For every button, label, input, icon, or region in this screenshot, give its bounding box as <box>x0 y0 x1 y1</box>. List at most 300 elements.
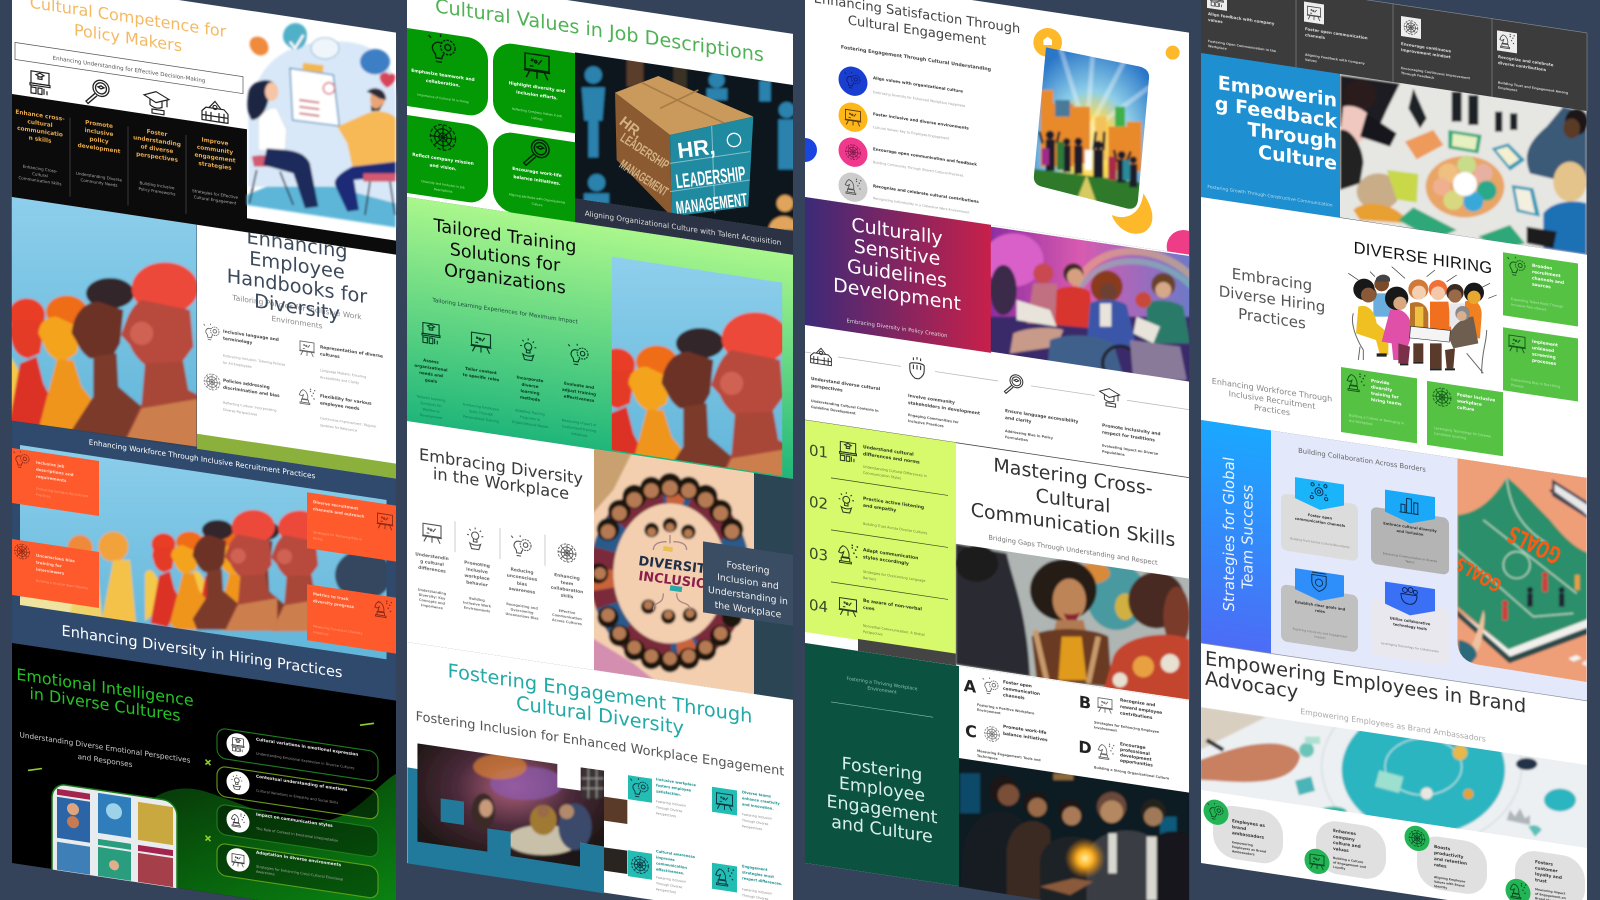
item: align values: Embracing Diversity for Enhanced Workplace Happiness <box>873 90 966 108</box>
photo: goals field book: GOALS <box>1503 520 1566 570</box>
card: mission: and vision. <box>429 162 457 172</box>
photo: diversity circle: INCLUSION <box>638 569 718 594</box>
step: reducing: Recognizing and <box>506 602 538 611</box>
card: cultural diversity: and inclusion <box>1397 529 1424 537</box>
step: evaluate <box>562 341 597 440</box>
title: Mastering Cross- <box>993 453 1153 500</box>
item: flexibility: Flexibility for various <box>320 394 372 407</box>
item: diverse teams: enhance creativity <box>742 796 780 806</box>
callout: metrics: diversity progress <box>313 598 355 609</box>
card: clear goals: roles <box>1315 609 1325 614</box>
card: clear goals <box>1281 566 1358 653</box>
panel: blue title: Through <box>1247 118 1337 154</box>
card: cultural variations: Cultural variations in emotional expression <box>256 737 358 757</box>
item: encourage communication <box>838 136 977 185</box>
title: Fostering <box>842 754 922 786</box>
goal 4: Strategies for Effective <box>192 188 238 200</box>
step: promoting: Environments <box>464 606 490 613</box>
title: Policy Makers <box>74 20 182 55</box>
callout: job descriptions: Inclusive job <box>36 460 64 469</box>
photo: clay heads <box>612 256 782 476</box>
feedback 1: values <box>1208 17 1223 24</box>
title: Diverse Hiring <box>1219 282 1325 316</box>
goal 2: inclusive <box>85 128 113 138</box>
card: communication channels: communication channels <box>1295 517 1345 528</box>
box: training: the Workplace <box>1349 419 1373 426</box>
card: technology tools: Utilize collaborative <box>1390 616 1430 626</box>
card: clear goals: Exploring Inclusivity and Engagement <box>1293 627 1347 639</box>
step: incorporate: Programs to <box>520 415 540 422</box>
box: culture: Leveraging Technology for Diverse <box>1434 426 1491 438</box>
title: Cultural <box>1036 484 1110 518</box>
hand-drawn heading: DIVERSE HIRING <box>1354 238 1492 278</box>
item: recognize: Recognize and celebrate cultural contributions <box>873 183 979 204</box>
feedback 3 <box>1401 16 1470 85</box>
subtitle box <box>15 42 243 94</box>
card: ambassadors: Employees as Brand <box>1232 845 1266 854</box>
feedback 4 <box>1497 30 1569 100</box>
goal 2 <box>76 119 122 189</box>
step: understand: Guideline Development <box>811 405 856 416</box>
box: culture: workplace <box>1457 398 1482 408</box>
step: assess: Development <box>420 413 443 420</box>
title: Culturally <box>851 213 943 250</box>
number 03 <box>809 539 925 589</box>
title: Guidelines <box>847 254 947 292</box>
card: cultural diversity: Embrace cultural diversity <box>1383 521 1437 533</box>
icon: magnifier <box>86 78 109 107</box>
goal 1: cultural <box>27 119 53 129</box>
card: enhances culture: Enhances <box>1333 829 1356 837</box>
item A: Environment <box>977 708 1001 715</box>
card: ambassadors: ambassadors <box>1232 830 1264 841</box>
card: loyalty <box>1506 847 1585 900</box>
number 03: Barriers <box>863 576 877 582</box>
item C: Measuring Engagement: Tools and <box>977 749 1041 762</box>
subtitle: Fostering Engagement Through Cultural Understanding <box>841 44 992 73</box>
step: promoting: workplace <box>464 573 490 582</box>
step: incorporate: learning <box>520 388 540 396</box>
item: representation: cultures <box>320 351 340 360</box>
goal 2: policy <box>89 137 109 146</box>
goal 4: engagement <box>194 152 236 165</box>
item A: Foster open <box>1003 680 1032 690</box>
title: Handbooks for <box>227 264 367 308</box>
item: representation: Representation of diverse <box>320 345 383 360</box>
card: ambassadors: Ambassadors <box>1232 849 1255 857</box>
item: cultural awareness: communication <box>656 861 687 870</box>
box: implement: Overcoming Bias in the Hiring <box>1511 378 1560 389</box>
item: recognize: Recognizing Individuality in a Collective Work Environment <box>873 196 970 215</box>
card: work-life balance: Aligning Job Roles with Organizational <box>509 192 565 205</box>
subtitle: Practices <box>1254 403 1290 417</box>
item: representation <box>299 341 383 389</box>
column 3 slides <box>805 0 1203 900</box>
title: Cultural Engagement <box>848 14 986 49</box>
card: loyalty: trust <box>1535 877 1547 885</box>
photo: HR cube <box>575 52 793 231</box>
box: broaden: recruitment <box>1532 269 1561 279</box>
panel: blue title: g Feedback <box>1215 92 1338 133</box>
box: implement <box>1503 327 1578 402</box>
photo: HR cube: LEADERSHIP <box>618 130 672 173</box>
card: adaptation: Adaptation in diverse environments <box>256 850 342 867</box>
step: ensure: and clarity <box>1005 415 1032 425</box>
callout: recruitment channels: Diverse recruitment <box>313 499 358 511</box>
panel: white slide <box>1201 643 1587 900</box>
photo: clay heads <box>12 196 197 446</box>
illustration: diverse hiring team <box>1348 267 1497 373</box>
goal 4: community <box>197 145 233 156</box>
slide: mastering cross-cultural communication <box>805 420 1193 703</box>
card: cultural variations: Understanding Emotional Expression in Diverse Cultures <box>256 752 355 770</box>
panel: dark feedback strip <box>1201 0 1587 255</box>
panel: white slide <box>1201 197 1587 478</box>
photo: team at table with blocks <box>407 740 627 893</box>
card: loyalty: customer <box>1535 865 1559 875</box>
card: productivity <box>1404 824 1487 897</box>
item: inclusive workplace: Inclusive workplace <box>656 777 696 787</box>
card: productivity: and retention <box>1434 856 1467 867</box>
card: mission: Descriptions <box>434 187 453 194</box>
goal 2: Promote <box>85 120 113 130</box>
step: assess <box>414 321 448 421</box>
item C: C <box>965 721 977 742</box>
step: reducing: awareness <box>509 586 536 596</box>
step: assess: Solutions for <box>420 401 442 408</box>
feedback 3: improvement mindset <box>1401 47 1451 59</box>
title: Development <box>833 273 961 315</box>
slide: emotional intelligence <box>12 643 396 900</box>
panel: callouts <box>12 448 396 654</box>
number 01: Understanding Cultural Differences in <box>863 465 927 478</box>
step: involve: Engaging Communities for <box>908 413 959 425</box>
panel: white slide with gradient header <box>805 197 1189 478</box>
step: promote: respect for traditions <box>1102 430 1155 444</box>
box: broaden: sources <box>1532 282 1551 290</box>
title: Tailored Training <box>434 216 576 257</box>
step: enhancing <box>551 542 583 626</box>
step: involve: Involve community <box>908 394 955 406</box>
callout: fostering inclusion: Understanding in <box>708 585 788 608</box>
title: Fostering Engagement Through <box>448 659 752 728</box>
card: ambassadors <box>1204 798 1283 866</box>
card: enhances culture <box>1304 817 1386 884</box>
panel: white slide <box>407 642 793 900</box>
card: loyalty: Measuring Impact <box>1535 887 1565 896</box>
step: assess: organizational <box>414 363 448 373</box>
step: tailor: Enhancing Employee <box>463 402 499 412</box>
item B: contributions <box>1120 710 1153 721</box>
number 04: Be aware of non-verbal <box>863 599 922 613</box>
card: loyalty: loyalty and <box>1535 871 1562 881</box>
step: evaluate: Customized Training <box>562 424 596 433</box>
number 04: Nonverbal Communication: A Global <box>863 624 925 637</box>
item: cultural awareness: improves <box>656 855 675 862</box>
item D: opportunities <box>1120 758 1153 769</box>
step: reducing: Reducing <box>511 568 533 576</box>
card: enhances culture: of Engagement and <box>1333 860 1366 869</box>
panel: blue side title <box>1201 420 1271 654</box>
number 01 <box>809 436 927 484</box>
step: tailor: Skills Through <box>469 409 493 417</box>
box: culture: culture <box>1457 405 1474 413</box>
step: tailor: to specific roles <box>463 372 500 382</box>
step: involve: Inclusive Practices <box>908 419 944 428</box>
item: inclusive workplace: Through Diverse <box>655 805 682 813</box>
subtitle: Inclusive Recruitment <box>1229 389 1315 411</box>
item C: balance initiatives <box>1003 731 1048 743</box>
feedback 3: Encourage continuous <box>1401 41 1451 53</box>
item: cultural awareness: Through Diverse <box>655 881 682 889</box>
goal 1: Enhance cross- <box>15 110 65 123</box>
step: incorporate: Incorporate <box>517 374 543 383</box>
photo: conversation <box>953 540 1193 703</box>
step: evaluate: effectiveness <box>564 394 595 403</box>
card: enhances culture: values <box>1333 846 1349 854</box>
step: tailor: Personalized Training <box>463 414 499 424</box>
slide: embracing diverse hiring <box>1201 197 1587 478</box>
card: teamwork: Importance of Cultural fit in Hiring <box>417 93 469 104</box>
panel: black goals <box>12 94 396 255</box>
item: foster inclusive: Foster inclusive and diverse environments <box>873 111 969 131</box>
card: productivity: Boosts <box>1434 845 1450 852</box>
step: assess: needs and <box>419 370 443 378</box>
item: representation: Language Matters: Ensuring <box>320 368 366 379</box>
box: broaden: channels and <box>1532 275 1564 286</box>
box: broaden: Inclusive Recruitment <box>1511 303 1547 312</box>
feedback 3: Encouraging Continuous Improvement <box>1401 66 1470 80</box>
card: work-life balance: balance initiatives. <box>513 174 561 187</box>
box: training: hiring teams <box>1371 397 1402 408</box>
card: enhances culture: Loyalty <box>1333 865 1345 871</box>
card: productivity: Identity <box>1434 884 1447 890</box>
card: communication channels: Foster open <box>1308 513 1332 521</box>
callout: job descriptions: Practices <box>36 493 51 499</box>
card: communication channels: Building Trust Across Cultural Boundaries <box>1290 536 1350 549</box>
number 03: Strategies for Overcoming Language <box>863 570 925 583</box>
title: Engagement <box>827 792 938 828</box>
number 01: Understand cultural <box>863 445 914 458</box>
card: teamwork <box>407 28 488 118</box>
card: contextual understanding: Contextual understanding of emotions <box>256 774 348 792</box>
number 03: Adapt communication <box>863 548 918 561</box>
card: diversity efforts: inclusion efforts. <box>516 89 558 102</box>
step: involve: stakeholders in development <box>908 400 980 417</box>
slide: empowering feedback <box>1201 0 1590 260</box>
goal 4: strategies <box>198 161 232 172</box>
item: encourage communication: Encourage open communication and feedback <box>873 146 977 167</box>
box: broaden <box>1503 252 1578 327</box>
item: cultural awareness: effectiveness. <box>656 867 684 876</box>
item: engagement strategies <box>712 860 782 900</box>
item: inclusive workplace: fosters employee <box>656 783 692 793</box>
callout: recruitment channels <box>307 492 396 562</box>
kicker: Fostering a Thriving Workplace <box>846 677 918 692</box>
decorative circles <box>805 28 1203 267</box>
step: understand <box>811 347 881 419</box>
feedback 1: Fostering Open Communication in the <box>1208 39 1276 53</box>
box: implement: unbiased <box>1532 345 1554 354</box>
callout: fostering inclusion: the Workplace <box>715 600 782 621</box>
item: representation: Accessibility and Clarity <box>320 375 359 385</box>
box: implement: Process <box>1511 383 1524 389</box>
goal 3: Foster <box>147 129 167 138</box>
feedback 1: Workplace <box>1208 44 1228 51</box>
card: adaptation: Awareness <box>256 870 275 876</box>
title: Sensitive <box>854 234 940 270</box>
card: mission: Reflect company mission <box>412 153 474 167</box>
photo: diversity circle <box>588 443 757 700</box>
card: technology tools: Leveraging Technology for Collaboration <box>1381 641 1439 654</box>
step: understanding: g cultural <box>420 558 444 568</box>
title: Solutions for <box>450 240 561 277</box>
card: productivity: rates <box>1434 862 1447 870</box>
step: enhancing: skills <box>561 593 574 600</box>
feedback 4: Employees <box>1498 86 1517 92</box>
step: assess: goals <box>425 377 438 384</box>
title: Emotional Intelligence <box>16 665 194 710</box>
step: incorporate: Organizational Needs <box>512 420 548 429</box>
photo: HR cube: HR, <box>676 134 717 163</box>
caption: Enhancing Workforce Through Inclusive Recruitment Practices <box>89 438 315 481</box>
goal 1: Communication Skills <box>18 175 62 186</box>
callout: fostering inclusion: Fostering <box>726 559 770 577</box>
panel: blue side title: Team Success <box>1239 483 1256 592</box>
callout: metrics: Metrics to track <box>313 591 349 602</box>
item: encourage communication: Building Community Through Shared Cultural Practices <box>873 160 964 178</box>
illustration: consultation <box>247 23 396 227</box>
callout: job descriptions: requirements <box>36 474 67 483</box>
photo: HR cube: LEADERSHIP <box>675 163 747 193</box>
step: understanding: differences <box>418 565 446 575</box>
column 4 slides <box>1200 0 1593 900</box>
goal 3 <box>133 127 181 197</box>
subtitle: Empowering Employees as Brand Ambassadors <box>1300 707 1486 744</box>
card: teamwork: collaboration. <box>426 78 460 89</box>
step: understand: Understand diverse cultural <box>811 377 880 392</box>
step: ensure: Addressing Bias in Policy <box>1005 429 1053 440</box>
item: flexibility: Continuous Improvement: Regular <box>320 416 376 429</box>
item: flexibility <box>299 388 377 436</box>
goal 3: understanding <box>133 135 181 148</box>
goal 3: Building Inclusive <box>139 180 175 190</box>
item B: Involvement <box>1094 725 1117 733</box>
card: technology tools <box>1371 580 1449 666</box>
feedback 4: Recognize and celebrate <box>1498 54 1553 67</box>
goal 1: n skills <box>29 136 52 145</box>
callout: metrics: Measuring Success in Diversity <box>313 624 363 636</box>
column 2 slides <box>407 0 800 900</box>
slide: fostering employee engagement <box>805 643 1193 900</box>
photo: group around table <box>1337 70 1590 260</box>
item: inclusive workplace: Fostering Inclusion <box>656 799 686 808</box>
callout: unconscious bias: training for <box>36 560 62 568</box>
goal 1: communicatio <box>17 126 63 139</box>
item A: A <box>964 676 977 697</box>
number 02 <box>809 487 927 535</box>
photo: HR cube: MANAGEMENT <box>675 189 748 218</box>
item: policies: Policies addressing <box>223 379 270 391</box>
card: cultural diversity <box>1371 488 1449 575</box>
step: assess: Tailored Learning <box>417 394 445 403</box>
step: assess: Assess <box>423 357 439 365</box>
title: and Culture <box>831 813 933 848</box>
step: enhancing: collaboration <box>551 585 583 595</box>
slide: employee handbooks <box>0 187 396 479</box>
feedback 1: Align feedback with company <box>1208 11 1274 26</box>
title: Employee <box>249 247 345 284</box>
subtitle box: Enhancing Understanding for Effective Decision-Making <box>53 56 205 84</box>
card: clear goals: Establish clear goals and <box>1295 600 1345 612</box>
title: Organizations <box>444 261 566 299</box>
teal blocks <box>407 767 604 893</box>
frame clip filler below slide <box>42 868 187 900</box>
item: diverse teams: Diverse teams <box>742 790 771 799</box>
feedback 2: channels <box>1305 32 1326 40</box>
title: Enhancing Diversity in Hiring Practices <box>62 623 342 682</box>
step: enhancing: Effective <box>559 609 575 615</box>
callout: fostering inclusion: Inclusion and <box>717 572 779 592</box>
photo: goals field book: GOALS <box>1452 552 1506 596</box>
subtitle: Tailoring Policies for Inclusive Work <box>232 293 362 321</box>
photo: team around lightbulb <box>957 757 1193 900</box>
item C: Techniques <box>977 754 998 761</box>
callout: job descriptions: Embracing Inclusive Recruitment <box>36 487 89 498</box>
callout: metrics <box>307 584 396 654</box>
item: inclusive workplace: satisfaction. <box>656 789 681 797</box>
photo overlay subtitle and cards <box>1204 692 1585 900</box>
panel: light slide <box>1201 420 1587 701</box>
goal 4: Improve <box>202 137 228 147</box>
item A <box>964 673 1040 721</box>
item: foster inclusive: Cultural Values: Key to Employee Engagement <box>873 125 950 141</box>
goal 1: Cultural <box>32 171 48 178</box>
step: incorporate: Adapting Training <box>515 408 545 417</box>
callout: job descriptions: descriptions and <box>36 467 74 477</box>
item B: reward employee <box>1120 704 1162 716</box>
goal 4 <box>192 136 238 206</box>
number 04: cues <box>863 606 875 612</box>
title: Employee <box>839 774 925 806</box>
subtitle: Enhancing Workforce Through <box>1212 377 1332 404</box>
item A: communication <box>1003 686 1040 697</box>
step: ensure: Ensure language accessibility <box>1005 409 1078 425</box>
card: ambassadors: Empowering <box>1232 840 1253 847</box>
box: implement: Implement <box>1532 340 1558 349</box>
feedback 4: diverse contributions <box>1498 60 1547 72</box>
number 02: 02 <box>809 493 828 513</box>
item D: Building a Strong Organizational Culture <box>1094 765 1170 781</box>
slide: enhancing satisfaction <box>805 0 1203 267</box>
callout: recruitment channels: Strategies for Reducing Bias in <box>313 530 362 542</box>
icon: lab <box>30 71 50 96</box>
photo: HR cube: HR, <box>616 114 646 142</box>
item: diverse teams <box>712 786 780 834</box>
item: engagement strategies: Engagement <box>742 864 767 872</box>
item D: D <box>1078 737 1092 758</box>
callout: unconscious bias: interviewers <box>36 567 65 576</box>
slide: empowering brand advocacy <box>1200 643 1593 900</box>
callout: unconscious bias: Unconscious bias <box>36 553 75 563</box>
panel: blue side title: Strategies for Global <box>1220 456 1238 613</box>
item: diverse teams: and innovation. <box>742 802 774 811</box>
item: policies: Reflecting Culture: Incorporating <box>223 401 277 413</box>
number 01: differences and norms <box>863 451 920 466</box>
title: in Diverse Cultures <box>29 684 181 725</box>
step: promoting: Promoting <box>464 561 490 569</box>
card: contextual understanding: Cultural Variations in Empathy and Social Skills <box>256 789 338 805</box>
